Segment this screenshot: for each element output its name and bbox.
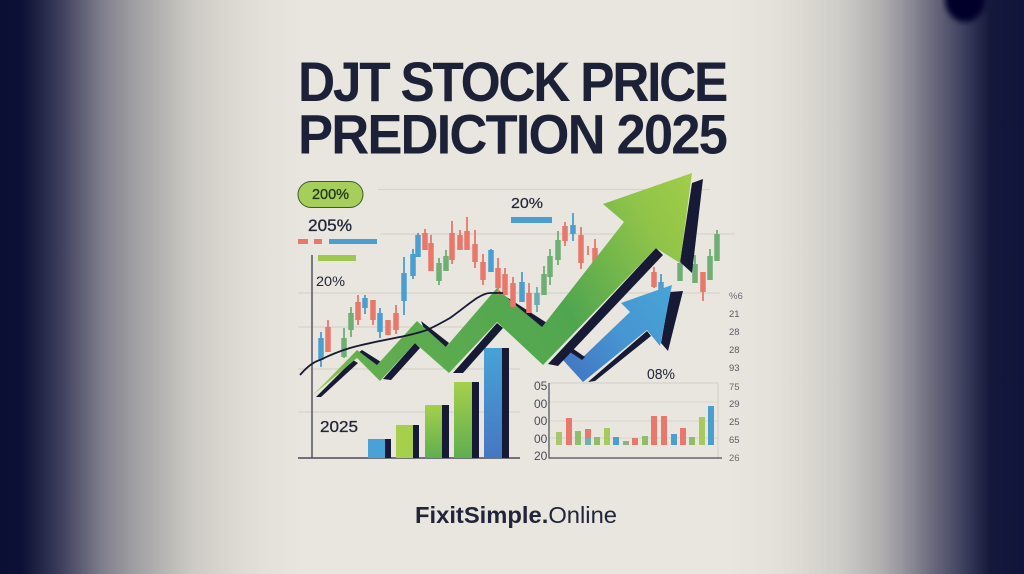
callout 20% with blue bar (511, 195, 552, 223)
arrow shadow (316, 179, 703, 397)
callout 20% with blue bar: 20% (511, 195, 543, 212)
label 20%: 20% (316, 273, 345, 289)
right axis labels: 25 (729, 417, 740, 428)
left axis labels (534, 379, 548, 463)
left axis labels: 00 (534, 397, 548, 411)
axes (298, 255, 520, 458)
arrow: blue secondary trend arrow (563, 285, 683, 382)
footer brand text: FixitSimple.Online (415, 502, 617, 528)
arrow body (313, 173, 692, 395)
green candles (344, 230, 717, 358)
blue candles (321, 213, 661, 367)
legend: percentage labels and color keys (298, 182, 377, 289)
right axis labels: 93 (729, 363, 740, 374)
title: DJT STOCK PRICE (298, 50, 727, 113)
right axis labels: %6 (729, 291, 743, 302)
red candles (328, 217, 703, 352)
panel frame (549, 383, 718, 458)
title: PREDICTION 2025 (298, 102, 727, 166)
trend line curve (300, 293, 503, 375)
right axis labels: 28 (729, 327, 740, 338)
bars (368, 439, 385, 458)
right axis labels (729, 291, 743, 464)
small bar chart panel (534, 366, 722, 463)
left axis labels: 00 (534, 432, 548, 446)
left axis labels: 05 (534, 379, 548, 393)
pill badge 200%: 200% (312, 187, 349, 203)
dark blob top right (945, 0, 985, 22)
candlestick chart (321, 213, 717, 367)
arrow: big green zigzag trend arrow (313, 173, 703, 397)
label 205%: 205% (308, 217, 352, 235)
left axis labels: 00 (534, 414, 548, 428)
left axis labels: 20 (534, 449, 548, 463)
right axis labels: 29 (729, 399, 740, 410)
title (298, 50, 727, 166)
bar chart: rising bars (298, 255, 520, 458)
right axis labels: 65 (729, 435, 740, 446)
label 2025: 2025 (320, 419, 358, 436)
right axis labels: 75 (729, 382, 740, 393)
right axis labels: 21 (729, 309, 740, 320)
bars (556, 406, 714, 445)
candles overlapping the arrow (498, 258, 537, 313)
right axis labels: 26 (729, 453, 740, 464)
chart label 08%: 08% (647, 366, 675, 383)
right axis labels: 28 (729, 345, 740, 356)
legend dashes (298, 239, 377, 261)
